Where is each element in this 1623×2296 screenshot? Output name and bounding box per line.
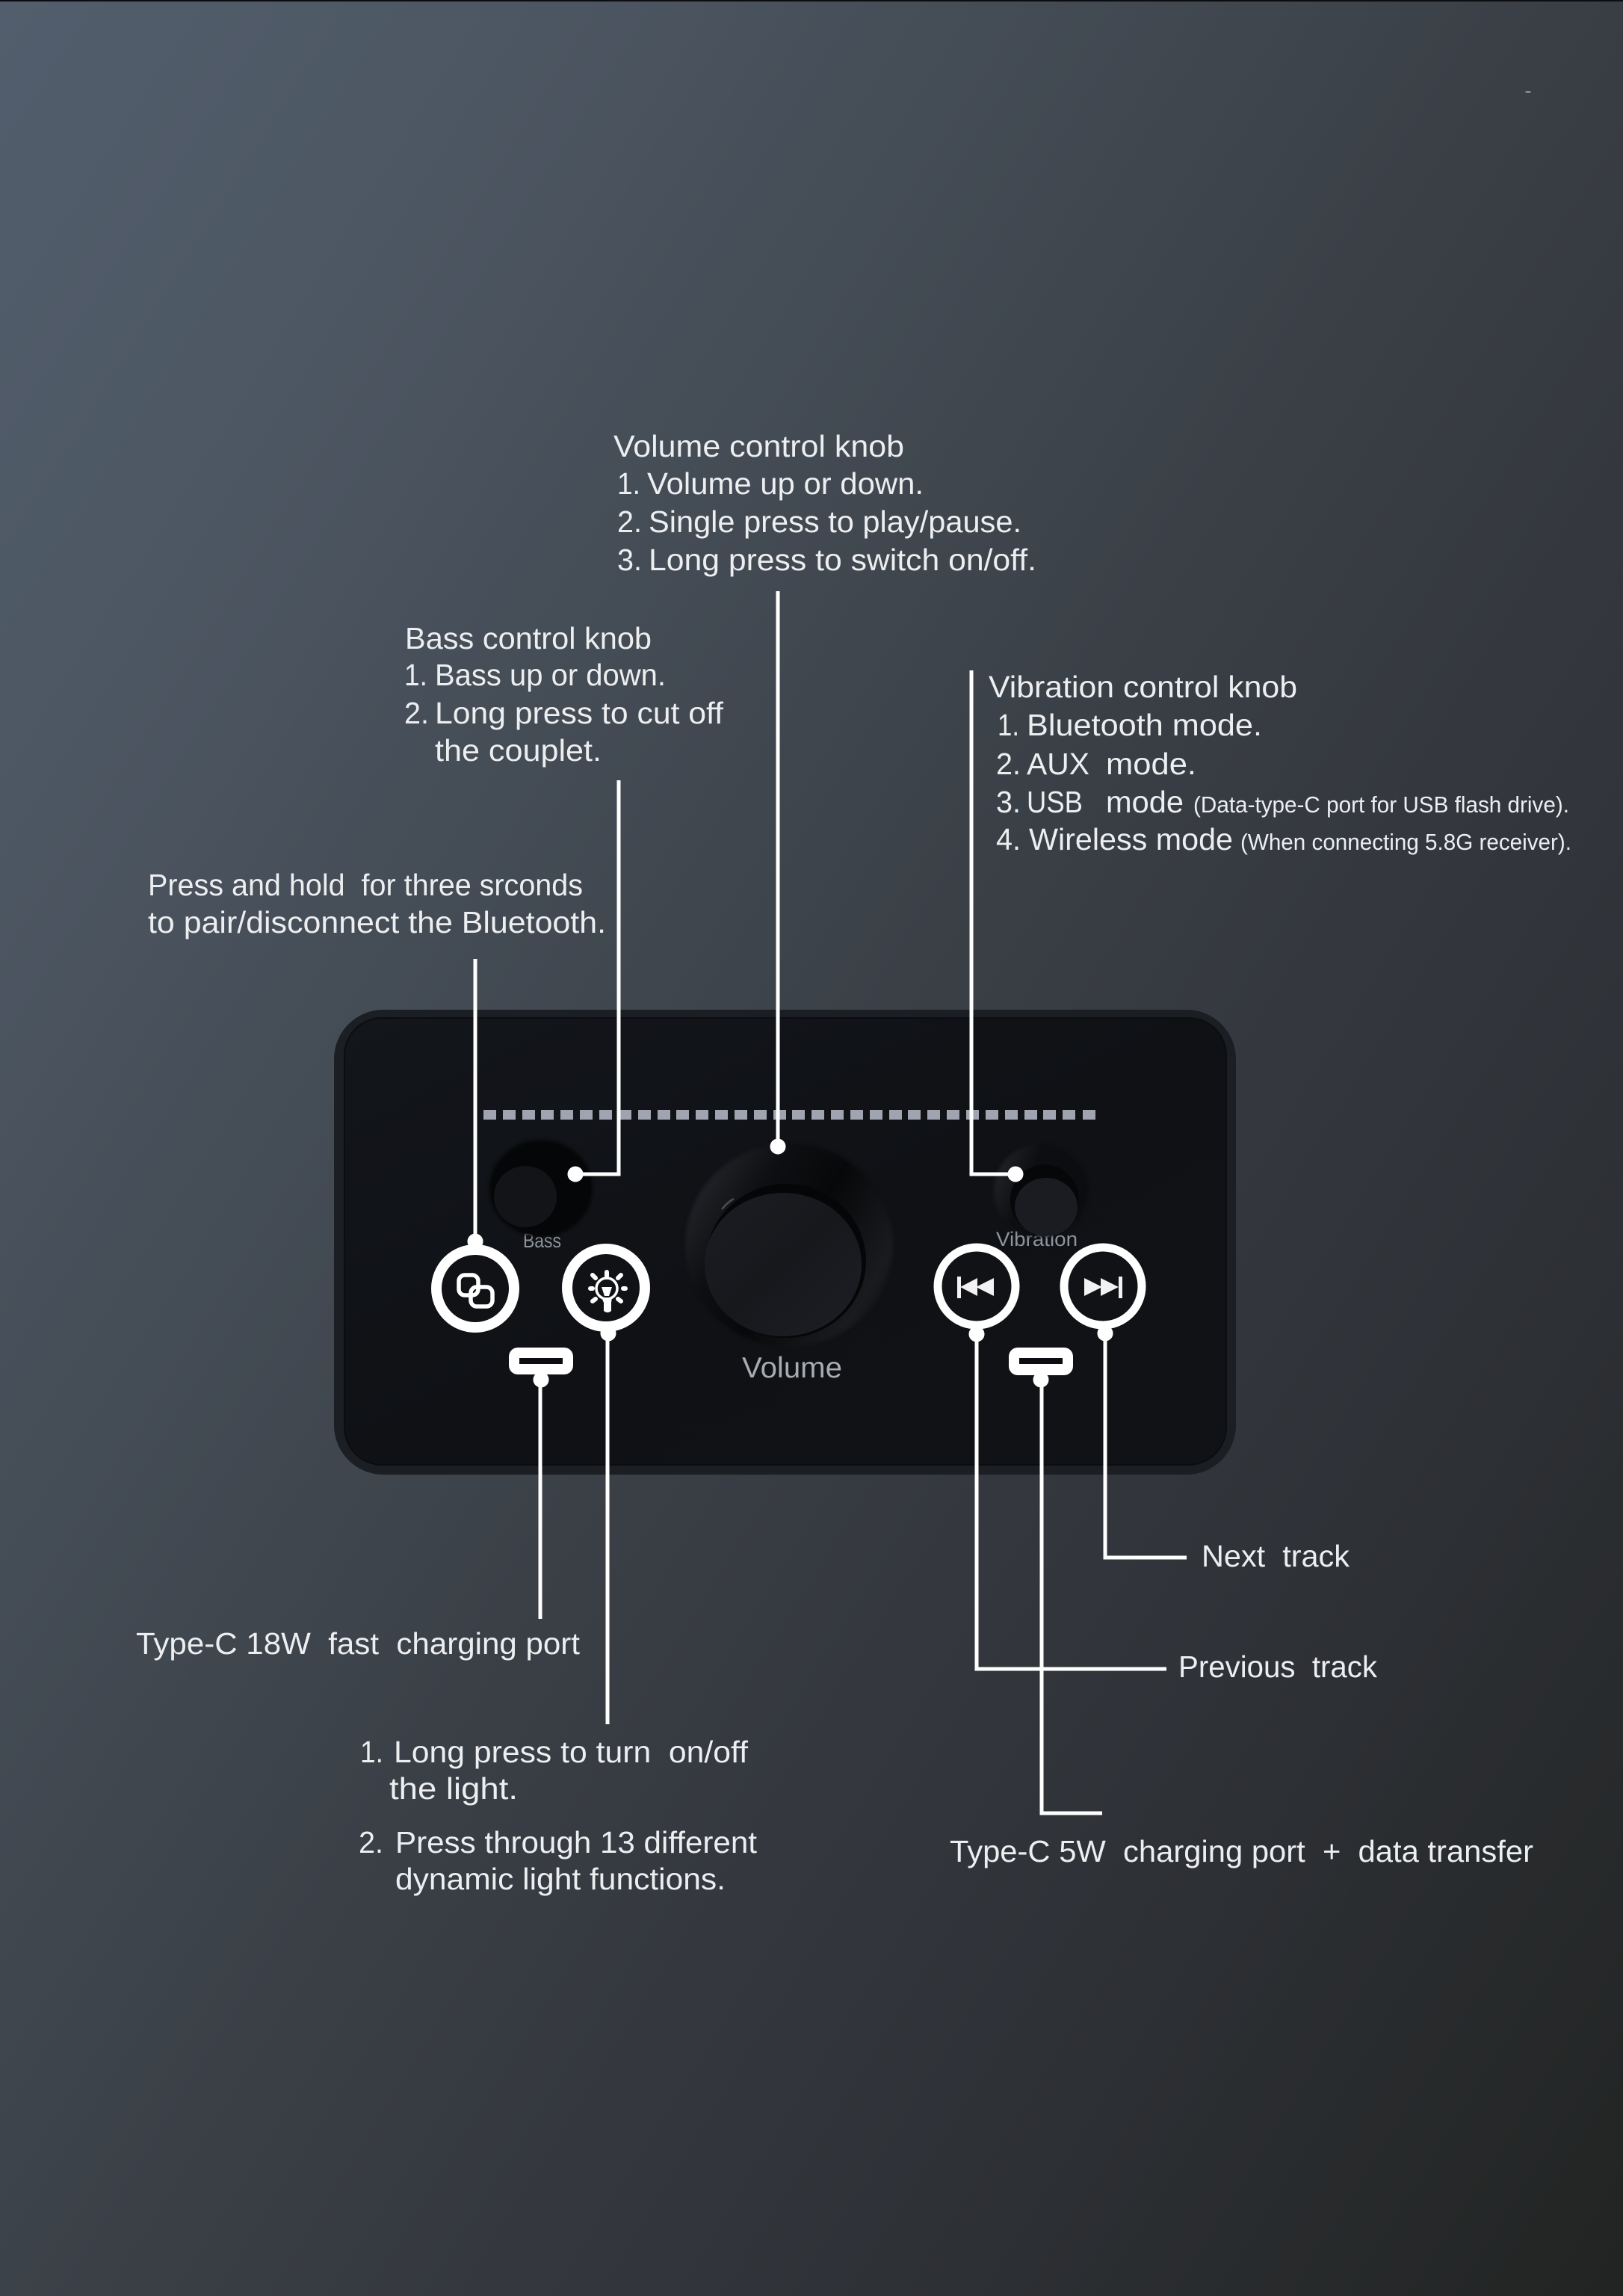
label: Bass: Bass bbox=[523, 1229, 561, 1252]
text: volume control knob: 3. bbox=[617, 543, 642, 577]
LED indicator strip bbox=[483, 1110, 1095, 1120]
text: vibration control knob bbox=[989, 670, 1571, 857]
icon: previous bbox=[957, 1277, 994, 1298]
text: volume control knob: Volume control knob bbox=[613, 429, 904, 463]
text: Type-C 18W port: Type-C 18W fast charging port bbox=[136, 1626, 581, 1661]
callout line: next track bbox=[1099, 1327, 1187, 1558]
text: bass control knob: Bass control knob bbox=[405, 621, 652, 655]
callout line: Type-C 5W bbox=[1035, 1374, 1102, 1813]
port: Type-C 5W bbox=[1009, 1348, 1073, 1375]
text: vibration control knob: USB bbox=[1027, 785, 1083, 819]
callout line: Vibration bbox=[971, 670, 1021, 1180]
vibration knob bbox=[994, 1144, 1088, 1237]
callout line: Bluetooth bbox=[469, 959, 481, 1247]
text: next track: Next track bbox=[1202, 1539, 1350, 1573]
text: vibration control knob: Vibration control knob bbox=[989, 670, 1297, 704]
text: vibration control knob: 1. bbox=[998, 708, 1019, 742]
button: light bbox=[567, 1249, 645, 1327]
text: vibration control knob: 3. bbox=[996, 785, 1021, 819]
text: vibration control knob: mode. bbox=[1106, 747, 1196, 781]
callout line: Type-C 18W bbox=[535, 1374, 547, 1619]
callout line: Bass bbox=[569, 780, 619, 1180]
text: volume control knob: 1. bbox=[617, 466, 640, 501]
button: Bluetooth pairing bbox=[436, 1250, 514, 1327]
port: Type-C 18W bbox=[509, 1348, 573, 1374]
bass knob bbox=[489, 1140, 593, 1237]
icon: light bulb bbox=[590, 1272, 625, 1312]
text: vibration control knob: (When connecting 5.8G receiver). bbox=[1240, 829, 1571, 855]
callout line: Volume bbox=[772, 591, 784, 1152]
text: bass control knob bbox=[404, 621, 724, 768]
text: previous track: Previous track bbox=[1178, 1650, 1377, 1684]
label: Vibration: Vibration bbox=[996, 1228, 1078, 1250]
text: volume control knob: 2. bbox=[617, 504, 642, 539]
text: vibration control knob: 2. bbox=[996, 747, 1021, 781]
text: volume control knob: Volume up or down. bbox=[647, 466, 924, 501]
text: light functions: 2. bbox=[359, 1825, 383, 1860]
text: vibration control knob: AUX bbox=[1027, 747, 1089, 781]
text: bass control knob: Bass up or down. bbox=[435, 658, 666, 692]
text: bass control knob: Long press to cut off bbox=[435, 696, 724, 730]
text: vibration control knob: Wireless mode bbox=[1029, 822, 1233, 857]
text: vibration control knob: mode bbox=[1106, 785, 1184, 819]
text: volume control knob: Long press to switch on/off. bbox=[649, 543, 1036, 577]
text: light functions bbox=[359, 1735, 758, 1896]
text: light functions: 1. bbox=[360, 1735, 383, 1769]
icon: linked squares bbox=[459, 1275, 492, 1306]
label: Volume: Volume bbox=[742, 1352, 842, 1384]
button: next track bbox=[1064, 1247, 1142, 1325]
text: light functions: the light. bbox=[389, 1771, 518, 1806]
text: bass control knob: 1. bbox=[404, 658, 427, 692]
text: Type-C 5W port: Type-C 5W charging port + data transfer bbox=[950, 1834, 1533, 1868]
text: light functions: Long press to turn on/off bbox=[394, 1735, 749, 1769]
text: light functions: dynamic light functions. bbox=[395, 1862, 726, 1896]
button: previous track bbox=[938, 1247, 1015, 1325]
icon: next bbox=[1084, 1277, 1122, 1298]
text: vibration control knob: Bluetooth mode. bbox=[1027, 708, 1262, 742]
callout line: previous track bbox=[971, 1328, 1166, 1669]
text: bluetooth pairing: to pair/disconnect the Bluetooth. bbox=[148, 905, 606, 939]
text: bass control knob: 2. bbox=[404, 696, 429, 730]
device control panel bbox=[334, 1010, 1236, 1475]
text: light functions: Press through 13 different bbox=[395, 1825, 758, 1860]
text: vibration control knob: 4. bbox=[996, 822, 1021, 857]
text: bass control knob: the couplet. bbox=[435, 733, 602, 768]
text: vibration control knob: (Data-type-C port for USB flash drive). bbox=[1193, 791, 1569, 818]
callout line: light bbox=[602, 1327, 614, 1724]
volume knob bbox=[685, 1144, 893, 1347]
text: bluetooth pairing bbox=[148, 868, 606, 939]
text: volume control knob bbox=[613, 429, 1036, 577]
text: bluetooth pairing: Press and hold for three srconds bbox=[148, 868, 583, 902]
text: volume control knob: Single press to play/pause. bbox=[649, 504, 1021, 539]
